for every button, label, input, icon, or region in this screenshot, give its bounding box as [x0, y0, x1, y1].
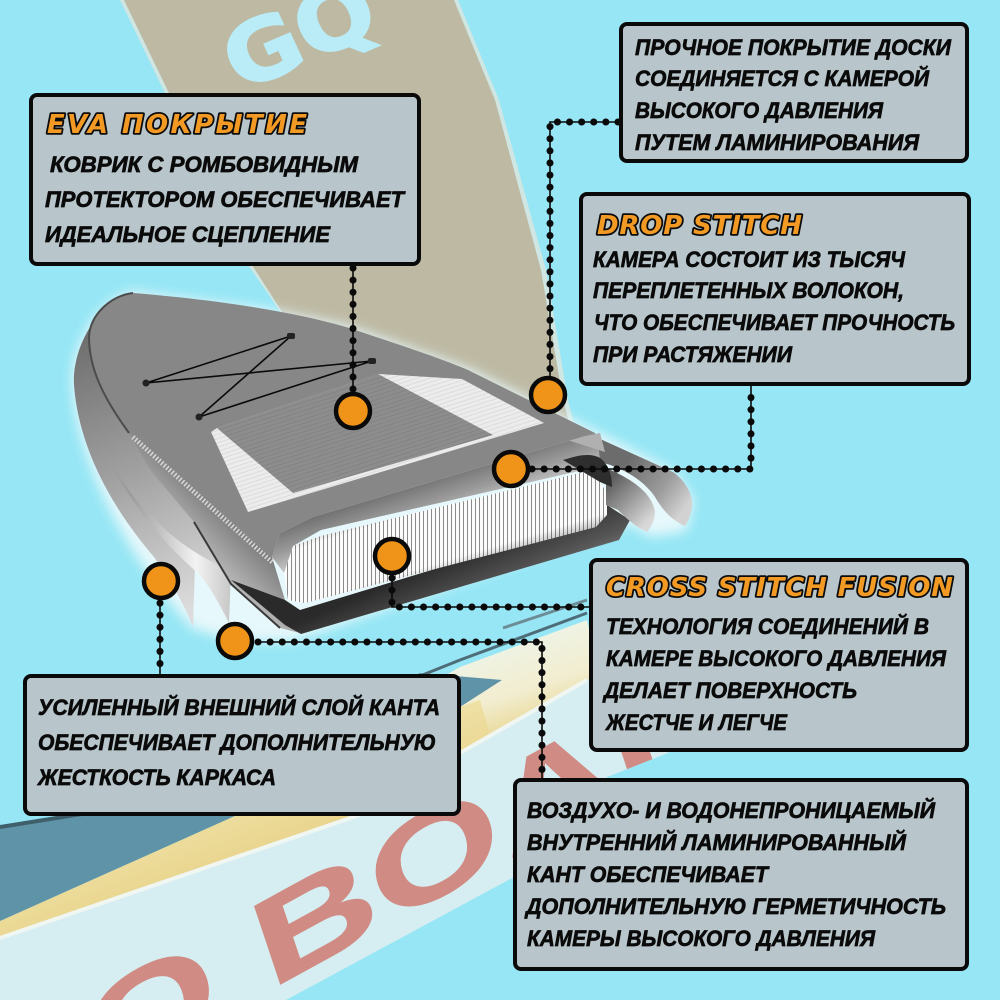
connector beads: laminated coating [550, 122, 618, 378]
text: drop stitch description: ПЕРЕПЛЕТЕННЫХ ВОЛОКОН, [593, 278, 904, 303]
glow behind cutaway board [74, 293, 692, 640]
text: cross stitch description: ЖЕСТЧЕ И ЛЕГЧЕ [605, 710, 788, 735]
panel: drop stitch [581, 194, 969, 384]
panel: laminated coating [621, 24, 967, 161]
rolled laminated lip [272, 433, 605, 573]
background board: tan fin-side deck with logo [120, 0, 578, 440]
panel: laminated coating: СОЕДИНЯЕТСЯ С КАМЕРОЙ [635, 65, 930, 91]
connector beads: drop stitch [532, 388, 751, 469]
teal deck pad [0, 673, 502, 921]
stitched seam along side [133, 437, 272, 562]
EVA pad: diamond tread centre [217, 374, 493, 493]
text: EVA description: ИДЕАЛЬНОЕ СЦЕПЛЕНИЕ [45, 222, 331, 247]
marker: coating [531, 378, 565, 412]
text: drop stitch description: КАМЕРА СОСТОИТ ИЗ ТЫСЯЧ [593, 247, 905, 272]
inner rail skin flap [112, 465, 231, 623]
right inner flap [606, 468, 655, 532]
panel: laminated coating: ПУТЕМ ЛАМИНИРОВАНИЯ [635, 130, 920, 155]
panel: reinforced outer rail: УСИЛЕННЫЙ ВНЕШНИЙ СЛОЙ КАНТА [38, 694, 440, 720]
top deck [89, 293, 595, 557]
panel: airtight inner rail [515, 780, 967, 969]
dark base under chamber [231, 505, 630, 634]
EVA pad: light tread [211, 374, 544, 512]
text: EVA description [45, 152, 406, 247]
panel: airtight inner rail: ВОЗДУХО- И ВОДОНЕПРОНИЦАЕМЫЙ [527, 797, 936, 823]
outer rail skin flap [74, 293, 272, 627]
connector: EVA [352, 265, 354, 395]
panel: EVA coating [31, 95, 419, 264]
text: EVA description: КОВРИК С РОМБОВИДНЫМ [50, 152, 359, 177]
panel: reinforced outer rail: ЖЕСТКОСТЬ КАРКАСА [37, 765, 276, 790]
connector beads: cross stitch [392, 578, 590, 607]
heading: drop stitch: DROP STITCH [597, 211, 802, 241]
cutaway board section [74, 293, 692, 634]
panel: airtight inner rail: ДОПОЛНИТЕЛЬНУЮ ГЕРМЕТИЧНОСТЬ [524, 894, 946, 919]
right cover flap [598, 438, 692, 526]
connector: outer rail [159, 600, 161, 675]
panel: airtight inner rail: ВНУТРЕННИЙ ЛАМИНИРОВАННЫЙ [527, 829, 907, 855]
marker: outer rail [144, 564, 178, 598]
side wall of board [129, 433, 300, 633]
foreground board lying below [0, 598, 668, 1000]
panel: cross stitch fusion [591, 560, 967, 750]
connector: cross stitch [392, 575, 590, 607]
panel: airtight inner rail: КАМЕРЫ ВЫСОКОГО ДАВЛЕНИЯ [527, 926, 876, 951]
panel: laminated coating: ПРОЧНОЕ ПОКРЫТИЕ ДОСКИ [635, 35, 952, 60]
cream deck near nose [420, 620, 600, 760]
text: drop stitch description [593, 247, 955, 367]
air chamber with drop-stitch fibres [284, 470, 607, 603]
marker: EVA [336, 394, 370, 428]
panel: laminated coating: ВЫСОКОГО ДАВЛЕНИЯ [635, 98, 884, 123]
marker: inner rail [218, 624, 252, 658]
heading: EVA: EVA ПОКРЫТИЕ [47, 110, 307, 140]
panel: airtight inner rail: КАНТ ОБЕСПЕЧИВАЕТ [527, 862, 770, 887]
heading: cross stitch: CROSS STITCH FUSION [606, 573, 953, 603]
connector: drop stitch [530, 385, 751, 469]
dark streaks at board edge [0, 600, 587, 827]
pale rail band [0, 640, 700, 1000]
text: drop stitch description: ЧТО ОБЕСПЕЧИВАЕТ ПРОЧНОСТЬ [594, 310, 955, 335]
connector beads: inner rail [258, 642, 542, 776]
text: EVA description: ПРОТЕКТОРОМ ОБЕСПЕЧИВАЕТ [45, 187, 406, 212]
inner dark corner [563, 455, 612, 487]
connector beads: outer rail [156, 603, 164, 675]
bungee cord [142, 333, 376, 420]
connector: inner rail [255, 642, 542, 778]
text: cross stitch description: КАМЕРЕ ВЫСОКОГО ДАВЛЕНИЯ [606, 646, 947, 671]
panel: reinforced outer rail: ОБЕСПЕЧИВАЕТ ДОПОЛНИТЕЛЬНУЮ [38, 730, 436, 755]
connector: laminated coating [550, 122, 620, 378]
panel: reinforced outer rail [25, 676, 459, 814]
yellow stripe [0, 700, 490, 938]
marker: drop stitch [494, 452, 528, 486]
text: cross stitch description [602, 613, 947, 735]
text: cross stitch description: ДЕЛАЕТ ПОВЕРХНОСТЬ [602, 678, 857, 703]
text: cross stitch description: ТЕХНОЛОГИЯ СОЕДИНЕНИЙ В [606, 613, 929, 639]
text: drop stitch description: ПРИ РАСТЯЖЕНИИ [593, 342, 793, 367]
marker: cross stitch [375, 539, 409, 573]
connector beads: EVA [350, 268, 356, 395]
